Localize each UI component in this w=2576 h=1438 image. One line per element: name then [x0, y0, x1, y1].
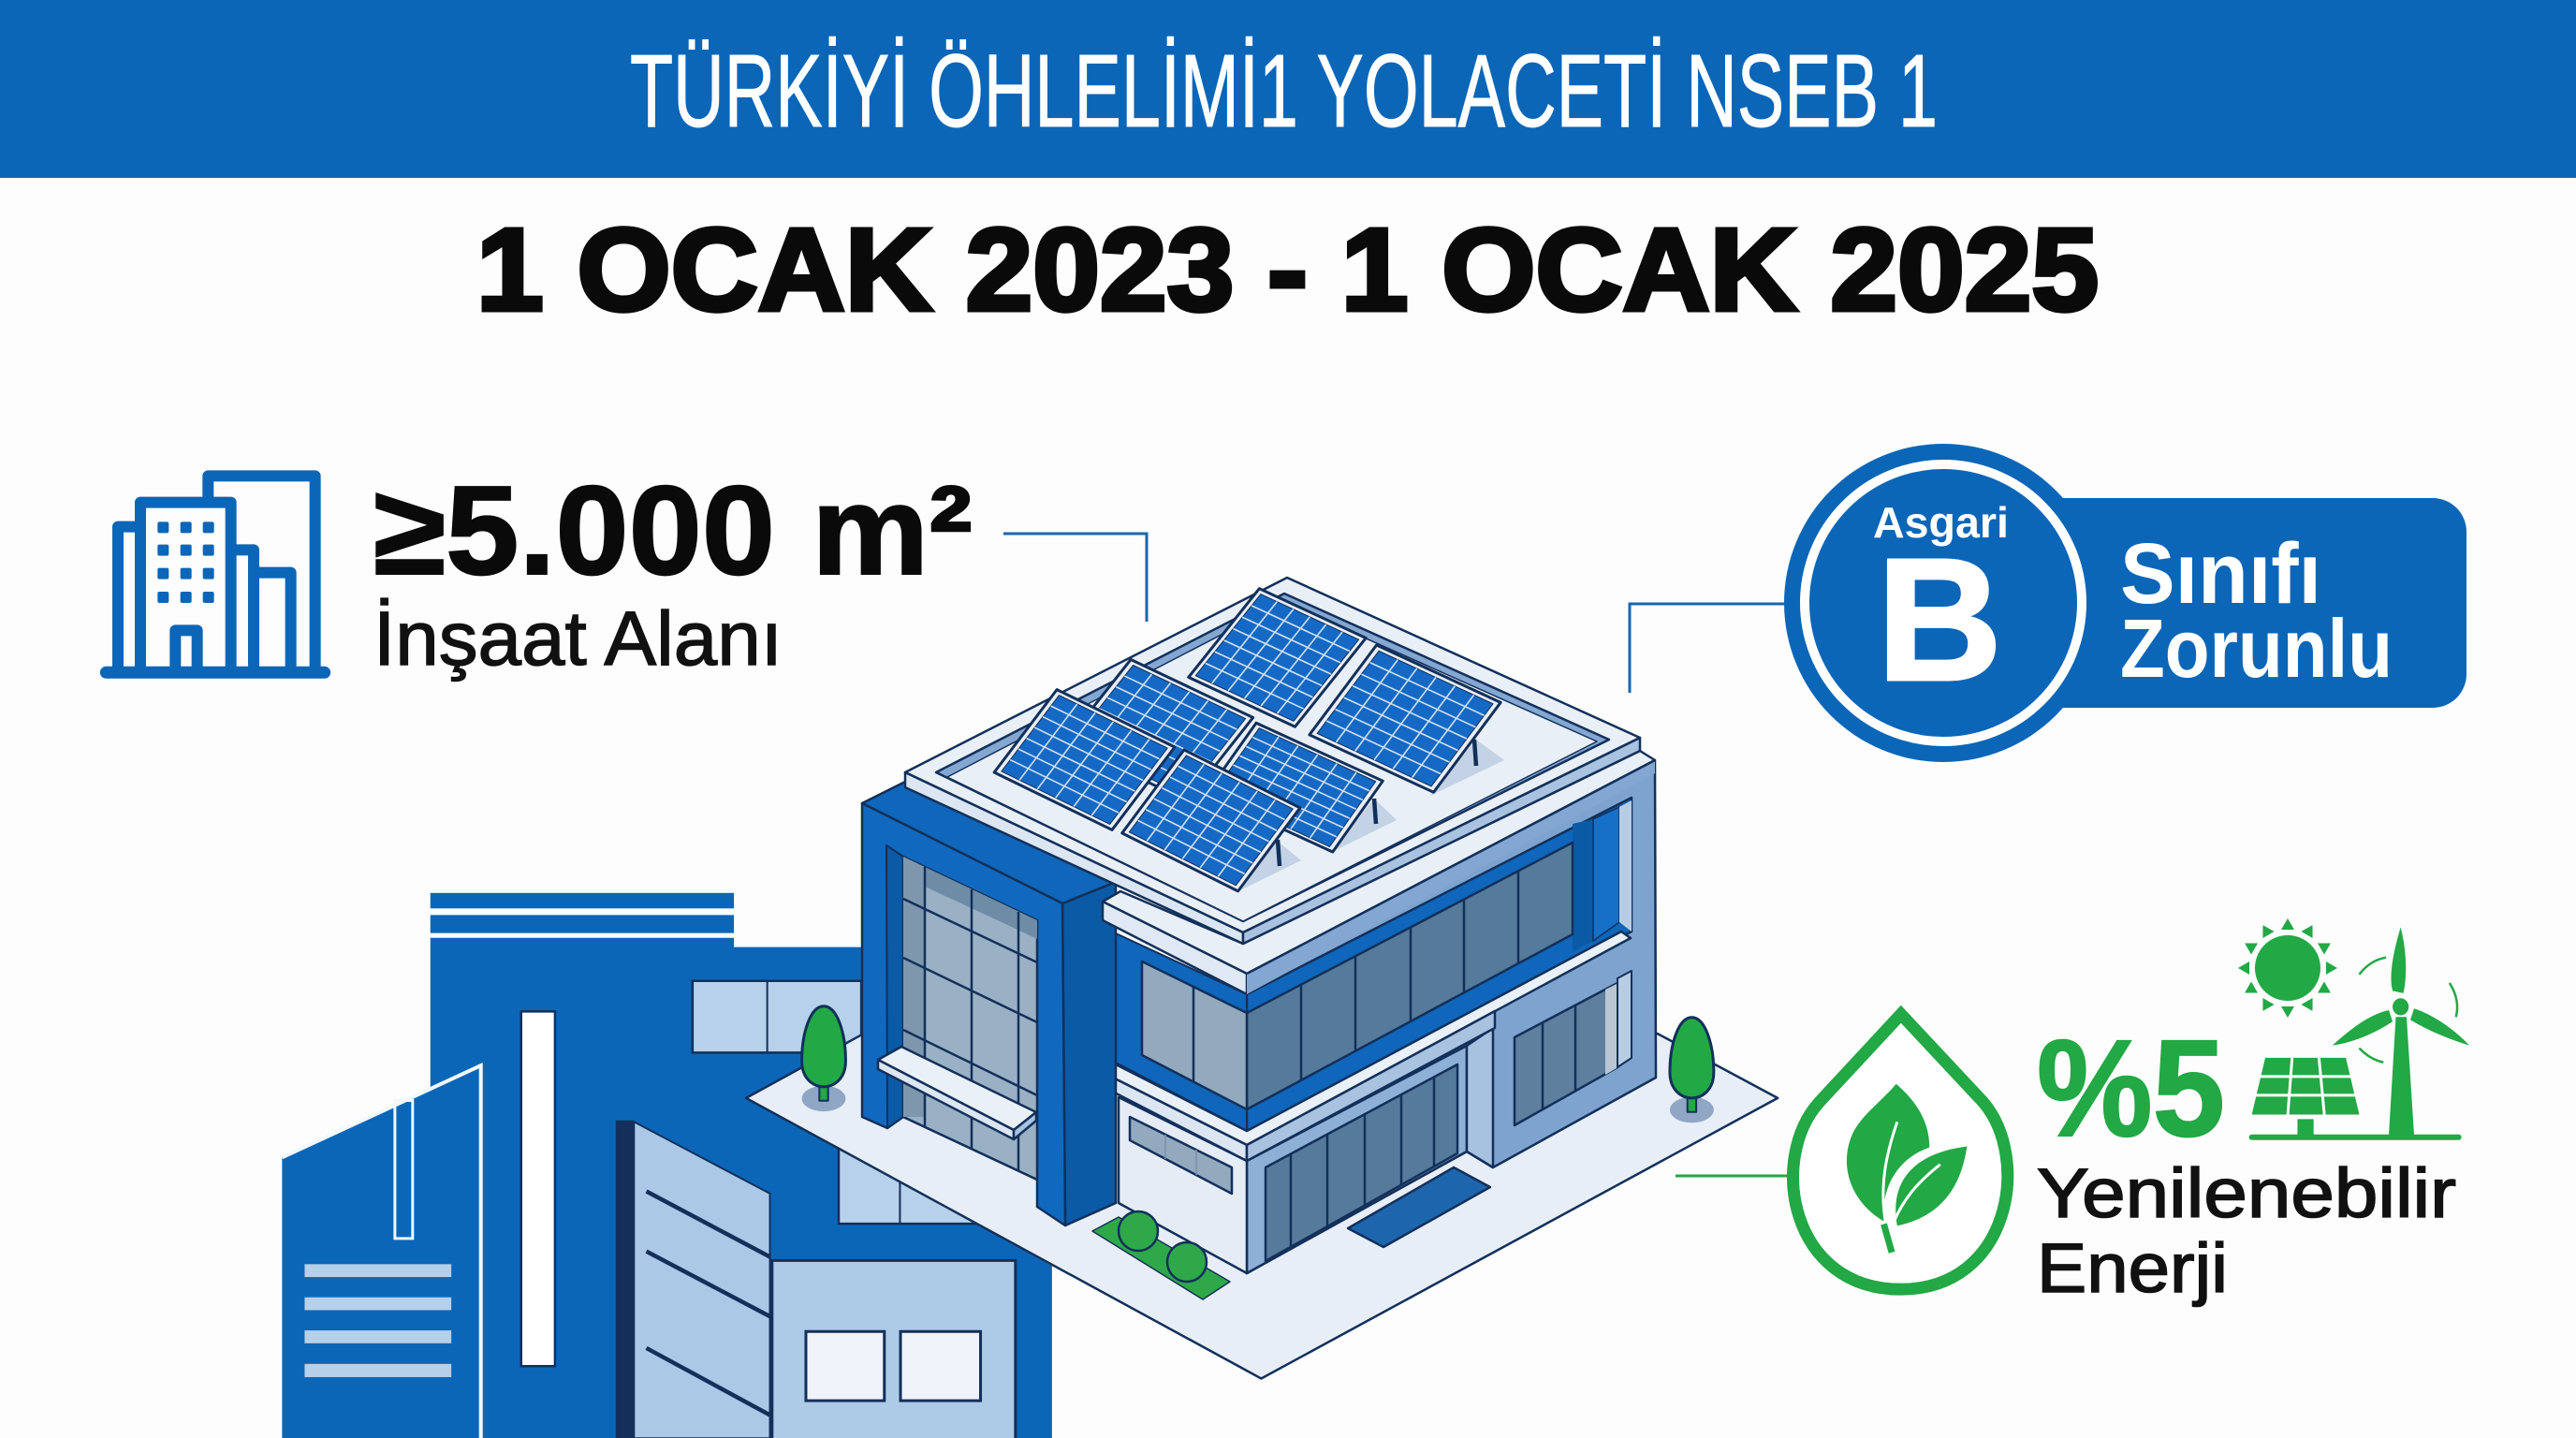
title: TÜRKİYİ ÖHLELİMİ1 YOLACETİ NSEB 1 [630, 34, 1938, 149]
entrance mat [1348, 1167, 1490, 1247]
renewable percentage: %5 [2037, 1012, 2225, 1166]
leader line: renewable [1676, 1174, 1788, 1178]
callout: renewable energy [1676, 918, 2469, 1307]
class text: Sınıfı [2120, 526, 2321, 622]
icon: drop with leaves [1793, 1014, 2008, 1289]
icon: sun [2238, 918, 2337, 1018]
shrubs [1092, 1211, 1230, 1299]
area label: İnşaat Alanı [373, 596, 783, 682]
roof overhang [1103, 751, 1655, 994]
badge ring [1805, 464, 2082, 741]
right wall [1247, 760, 1656, 1273]
badge bar [1966, 498, 2466, 708]
panel shadows and legs [1238, 740, 1504, 891]
upper left face [1116, 933, 1247, 1131]
mandatory text: Zorunlu [2120, 602, 2393, 695]
renewable label line 2: Enerji [2037, 1229, 2228, 1307]
leader line: area [1003, 534, 1147, 622]
middle floor slab [1102, 932, 1631, 1161]
solar panels [994, 589, 1500, 891]
icon: wind turbine and solar panel [2252, 928, 2469, 1137]
badge circle [1784, 444, 2102, 762]
callout: minimum class B [1630, 444, 2466, 762]
roof deck [905, 578, 1640, 944]
date range heading: 1 OCAK 2023 - 1 OCAK 2025 [476, 205, 2099, 335]
left tower [862, 782, 1116, 1225]
area value: ≥5.000 m² [373, 460, 973, 601]
illustration: neighbouring blue buildings [282, 893, 1052, 1438]
callout: construction area [106, 460, 1147, 682]
icon: buildings [106, 476, 325, 672]
lower left wall [1119, 1097, 1247, 1273]
illustration: main building with solar panels [746, 578, 1778, 1378]
window sill [878, 1047, 1036, 1139]
leader line: class [1630, 604, 1788, 693]
upper window band [1247, 798, 1632, 1131]
renewable label line 1: Yenilenebilir [2037, 1154, 2456, 1232]
badge label: Asgari [1873, 498, 2009, 547]
ground plot and trees [746, 1006, 1778, 1378]
header banner [0, 0, 2576, 178]
lower right storefront [1247, 971, 1632, 1273]
badge letter: B [1877, 523, 2002, 717]
